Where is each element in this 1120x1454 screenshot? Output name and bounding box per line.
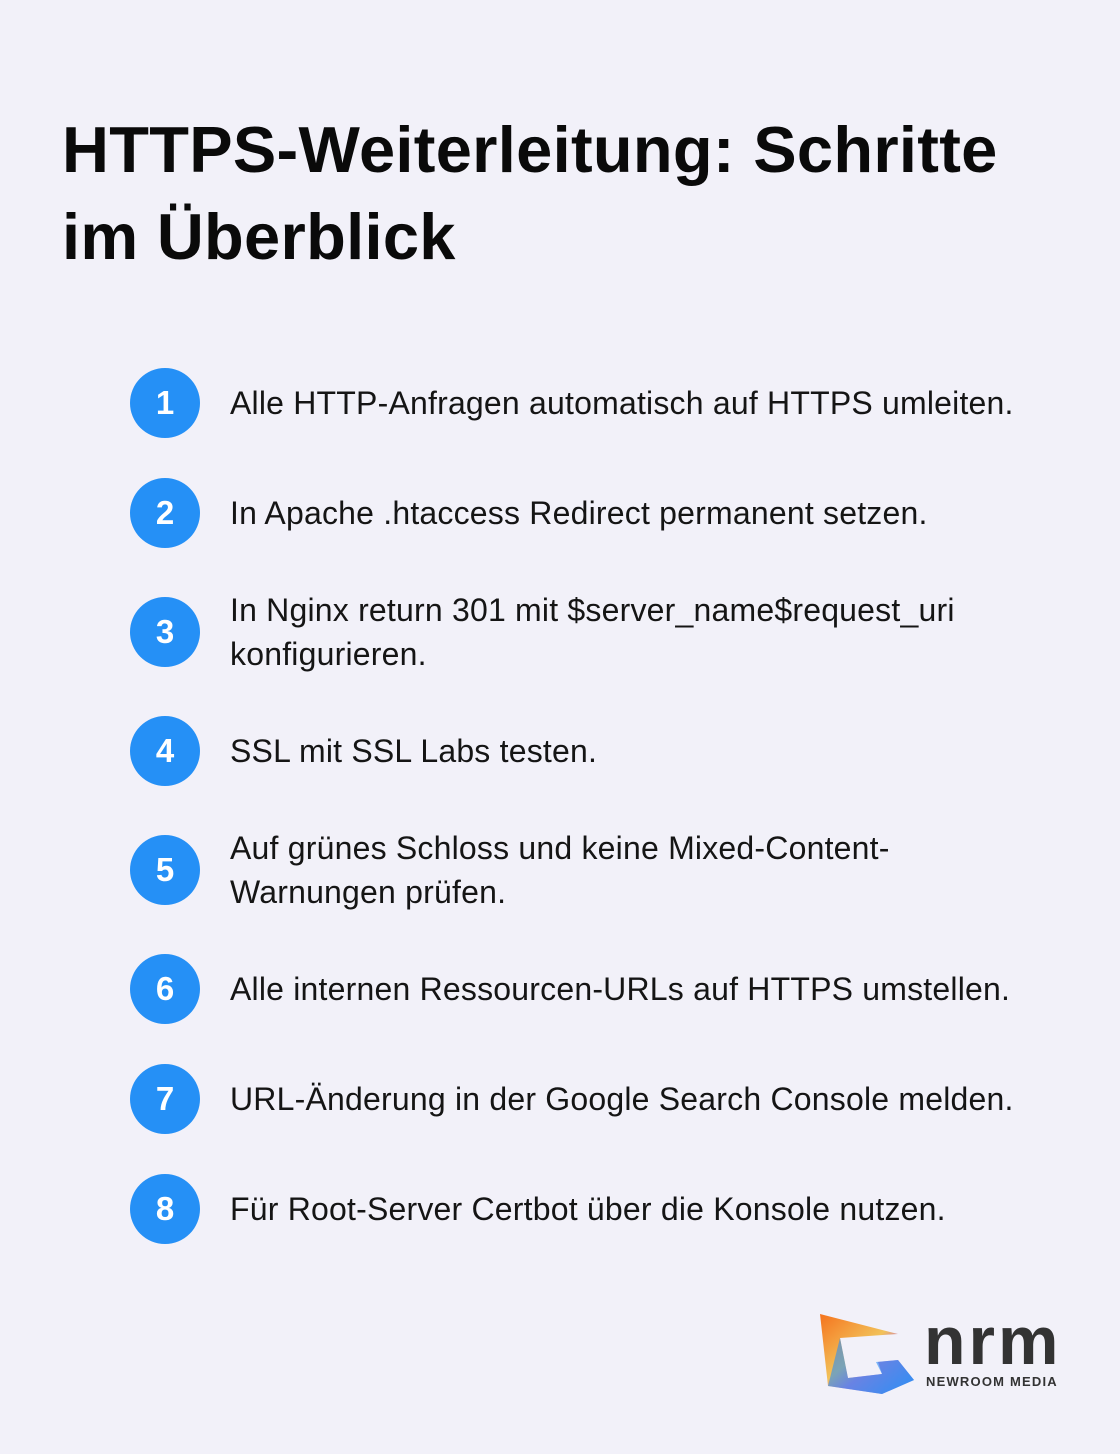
- step 7: 7: [156, 1080, 174, 1117]
- icon: logo mark: [820, 1314, 914, 1394]
- title: HTTPS-Weiterleitung: Schritte: [62, 113, 998, 186]
- step 4: 4: [156, 732, 174, 769]
- step 3: konfigurieren.: [230, 636, 427, 672]
- title: im Überblick: [62, 200, 456, 273]
- logo: NEWROOM MEDIA: [926, 1374, 1058, 1389]
- step 8: Für Root-Server Certbot über die Konsole nutzen.: [230, 1191, 946, 1227]
- step 5: 5: [156, 851, 174, 888]
- step 3: In Nginx return 301 mit $server_name$request_uri: [230, 592, 955, 628]
- step 5: [130, 830, 890, 910]
- step 4: [130, 716, 597, 786]
- step 2: In Apache .htaccess Redirect permanent setzen.: [230, 495, 928, 531]
- step 6: [130, 954, 1010, 1024]
- step 6: 6: [156, 970, 174, 1007]
- step 8: 8: [156, 1190, 174, 1227]
- step 6: Alle internen Ressourcen-URLs auf HTTPS umstellen.: [230, 971, 1010, 1007]
- step 4: SSL mit SSL Labs testen.: [230, 733, 597, 769]
- step 3: 3: [156, 613, 174, 650]
- title: [62, 113, 998, 273]
- step 1: Alle HTTP-Anfragen automatisch auf HTTPS umleiten.: [230, 385, 1014, 421]
- logo: [820, 1303, 1061, 1394]
- step 1: 1: [156, 384, 174, 421]
- step 7: URL-Änderung in der Google Search Console melden.: [230, 1081, 1014, 1117]
- step 2: 2: [156, 494, 174, 531]
- logo text: nrm: [924, 1303, 1061, 1379]
- step 7: [130, 1064, 1014, 1134]
- step 8: [130, 1174, 946, 1244]
- step 5: Warnungen prüfen.: [230, 874, 506, 910]
- step 3: [130, 592, 955, 672]
- step 1: [130, 368, 1014, 438]
- step 2: [130, 478, 928, 548]
- step 5: Auf grünes Schloss und keine Mixed-Content-: [230, 830, 890, 866]
